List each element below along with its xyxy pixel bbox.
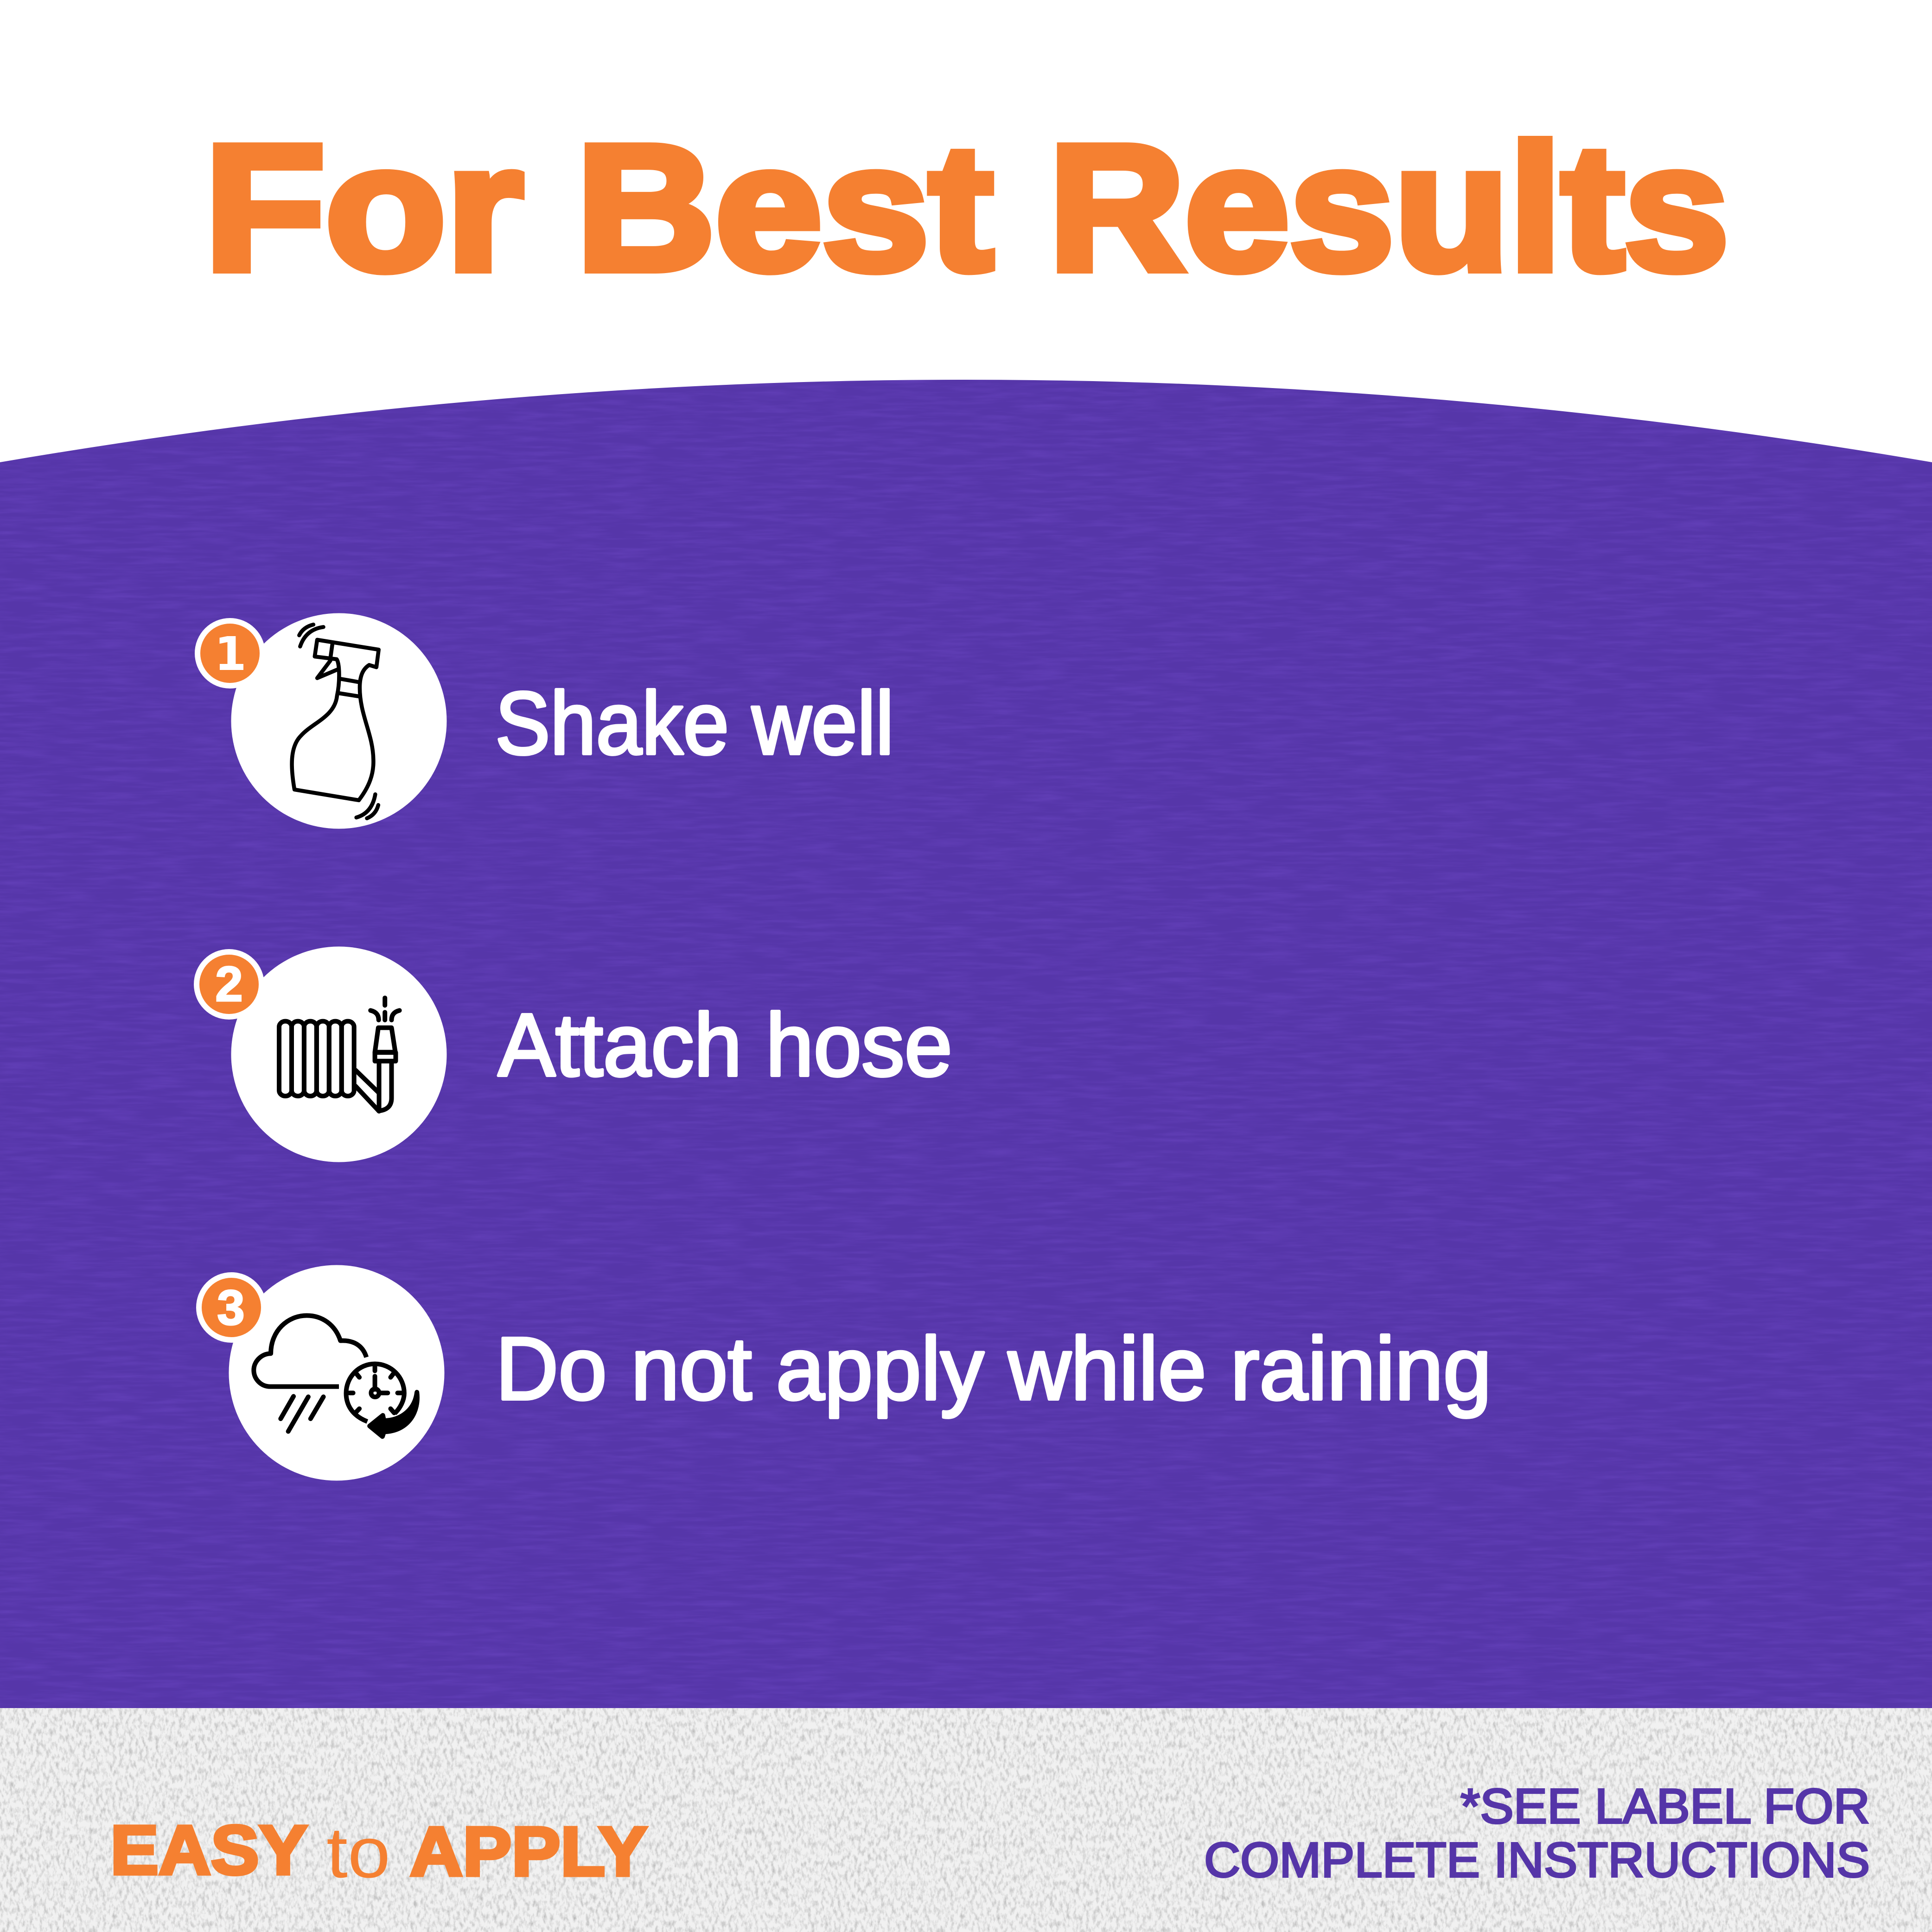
- footer slogan: to: [326, 1812, 390, 1893]
- step 2: attach hose: [194, 947, 952, 1162]
- icon circle 3: [229, 1265, 444, 1481]
- step text 2: Attach hose: [498, 995, 952, 1095]
- footnote: [1204, 1779, 1870, 1887]
- footer slogan: EASY: [110, 1811, 307, 1889]
- icon: hose reel: [279, 998, 400, 1111]
- title: [204, 108, 1729, 307]
- title: For: [204, 108, 523, 307]
- step 1: shake well: [195, 613, 894, 829]
- step 3: do not apply while raining: [196, 1265, 1492, 1481]
- footer slogan: [110, 1811, 647, 1893]
- badge 3: 3: [217, 1280, 245, 1335]
- step text 1: Shake well: [495, 673, 894, 773]
- icon: rain cloud and clock: [254, 1315, 417, 1436]
- badge 3: [196, 1272, 267, 1343]
- title: Results: [1049, 108, 1729, 307]
- badge 1: 1: [214, 627, 247, 681]
- footer slogan: APPLY: [410, 1812, 647, 1890]
- title: Best: [576, 108, 993, 307]
- panel: purple wood background: [0, 380, 1932, 1708]
- icon: spray bottle: [292, 625, 379, 818]
- panel: footer textured band: [0, 1708, 1932, 1932]
- badge 2: [194, 949, 264, 1020]
- badge 1: [195, 618, 265, 689]
- footnote: *SEE LABEL FOR: [1460, 1779, 1870, 1834]
- icon circle 2: [231, 947, 447, 1162]
- step text 3: Do not apply while raining: [496, 1319, 1492, 1418]
- badge 2: 2: [215, 956, 243, 1012]
- icon circle 1: [231, 613, 447, 829]
- footnote: COMPLETE INSTRUCTIONS: [1204, 1833, 1870, 1887]
